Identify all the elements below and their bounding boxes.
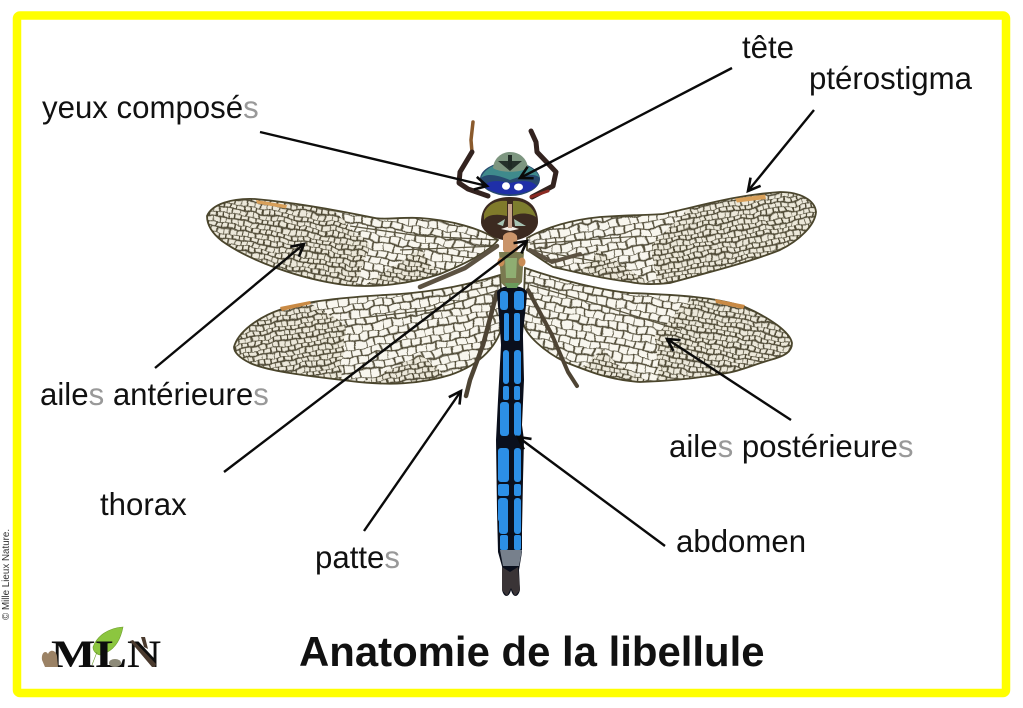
ptérostigma: left hindwing	[280, 301, 311, 311]
wing: left hindwing	[233, 274, 502, 385]
icon: woodpecker and branch	[130, 637, 156, 667]
label: ailes postérieures: ailes postérieures	[669, 429, 913, 464]
arrow: abdomen	[518, 437, 665, 546]
label: thorax: thorax	[100, 487, 187, 522]
ptérostigma: right forewing	[735, 194, 766, 202]
icon: leaf	[92, 627, 123, 665]
label: abdomen: abdomen	[676, 524, 806, 559]
arrow: ailes antérieures	[155, 244, 304, 368]
logo letters: MLN	[51, 633, 161, 676]
wing: right forewing	[526, 191, 817, 285]
thorax	[481, 197, 538, 288]
ptérostigma: right hindwing	[715, 299, 745, 309]
icon: hedgehog	[109, 659, 121, 667]
title: Anatomie de la libellule	[299, 628, 765, 675]
wing: left forewing	[206, 198, 500, 287]
label: tête: tête	[742, 30, 794, 65]
label: ptérostigma: ptérostigma	[809, 61, 973, 96]
icon: squirrel	[42, 651, 58, 667]
label: yeux composés: yeux composés	[42, 90, 259, 125]
arrow: ailes postérieures	[667, 339, 791, 420]
arrow: yeux composés	[260, 132, 487, 186]
copyright note: © Mille Lieux Nature.	[1, 529, 12, 620]
white eye spots	[502, 182, 510, 190]
logo: MLN	[42, 627, 161, 676]
ptérostigma: left forewing	[256, 200, 287, 208]
arrow: tête	[520, 68, 732, 178]
arrow: thorax	[224, 241, 527, 472]
head and compound eyes	[480, 152, 540, 196]
wing: right hindwing	[523, 266, 793, 383]
dragonfly illustration	[190, 122, 830, 596]
abdomen	[496, 283, 527, 596]
label: pattes: pattes	[315, 540, 400, 575]
arrow: pattes	[364, 391, 461, 531]
arrow: ptérostigma	[748, 110, 814, 191]
label: ailes antérieures: ailes antérieures	[40, 377, 269, 412]
legs	[420, 122, 580, 396]
